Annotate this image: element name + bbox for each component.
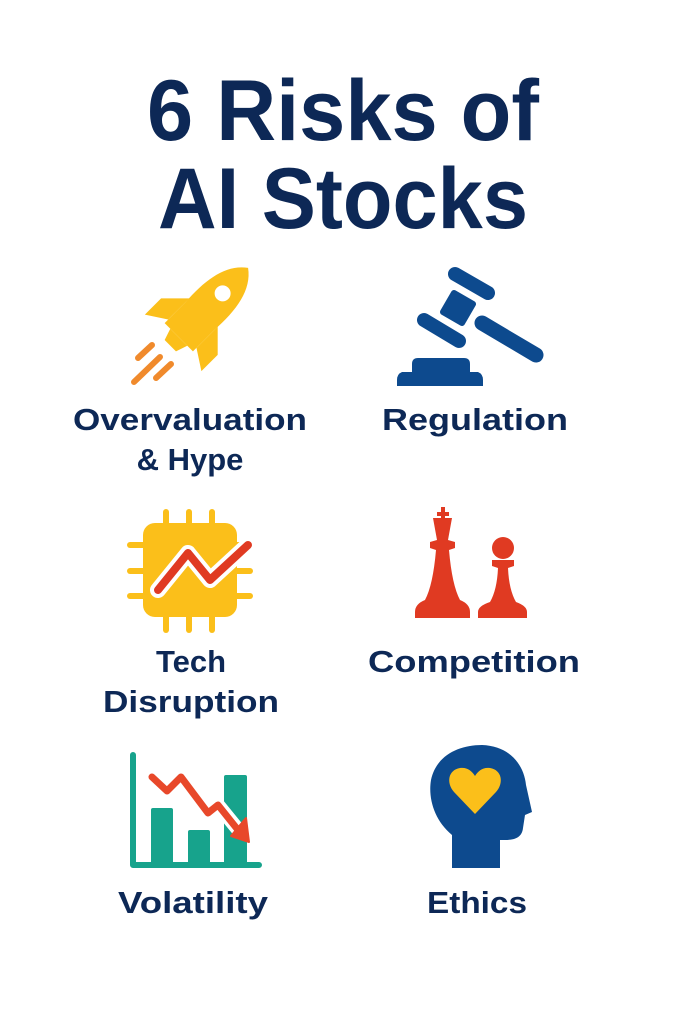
label: competition: Competition bbox=[368, 644, 580, 679]
icon: chip with trend line bbox=[130, 512, 250, 630]
icon: chess pieces bbox=[415, 507, 527, 618]
label: regulation: Regulation bbox=[382, 402, 568, 437]
icon: volatility chart bbox=[133, 755, 259, 865]
title: AI Stocks bbox=[158, 151, 528, 247]
label: overvaluation & hype bbox=[73, 402, 307, 477]
label: overvaluation & hype: Overvaluation bbox=[73, 402, 307, 437]
label: volatility: Volatility bbox=[118, 885, 269, 920]
icon: head with heart bbox=[430, 745, 532, 868]
label: overvaluation & hype: & Hype bbox=[137, 442, 243, 477]
label: ethics: Ethics bbox=[427, 885, 527, 920]
title bbox=[147, 63, 539, 247]
icon: rocket bbox=[134, 240, 276, 382]
label: tech disruption bbox=[103, 644, 279, 719]
title: 6 Risks of bbox=[147, 63, 539, 159]
label: tech disruption: Tech bbox=[156, 644, 226, 679]
icon: gavel bbox=[397, 274, 536, 386]
label: tech disruption: Disruption bbox=[103, 684, 279, 719]
